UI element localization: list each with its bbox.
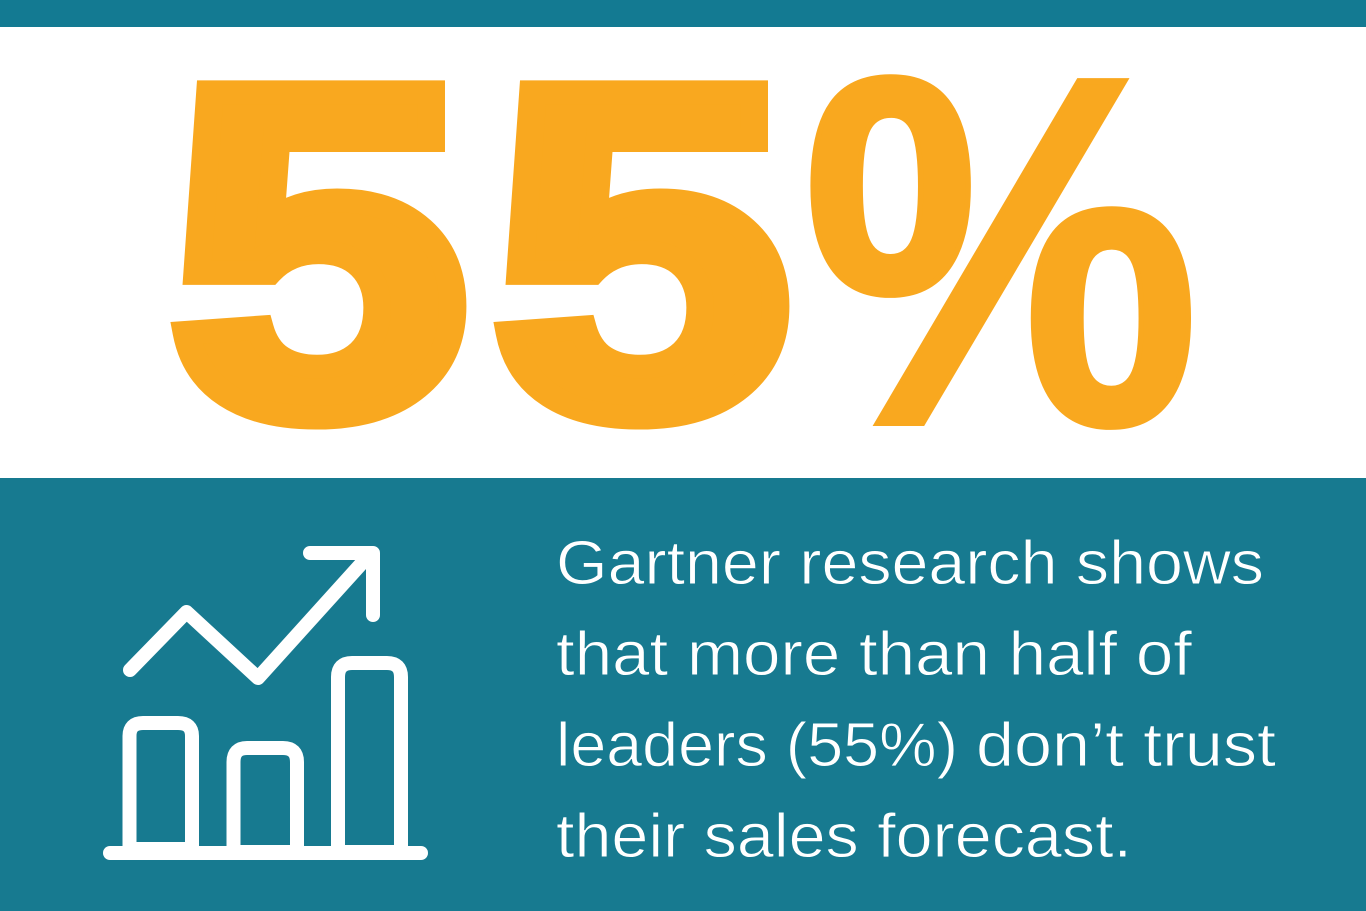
body text: that more than half of [556, 620, 1193, 689]
body text: Gartner research shows [556, 529, 1264, 598]
icon: baseline [110, 846, 421, 860]
body text [556, 529, 1276, 871]
bottom teal panel [0, 478, 1366, 911]
body text: don’t trust [976, 711, 1276, 780]
icon: bars [130, 663, 401, 850]
icon: rising bar chart with arrow [110, 553, 421, 853]
icon: trend arrow [130, 553, 373, 678]
headline statistic: 55%: 5 [493, 0, 791, 512]
headline statistic: 55% [170, 0, 1200, 529]
top teal band [0, 0, 1366, 27]
body text: their sales forecast. [556, 802, 1132, 871]
body text: leaders (55%) [556, 711, 958, 780]
headline statistic: 55%: 5 [170, 0, 468, 512]
